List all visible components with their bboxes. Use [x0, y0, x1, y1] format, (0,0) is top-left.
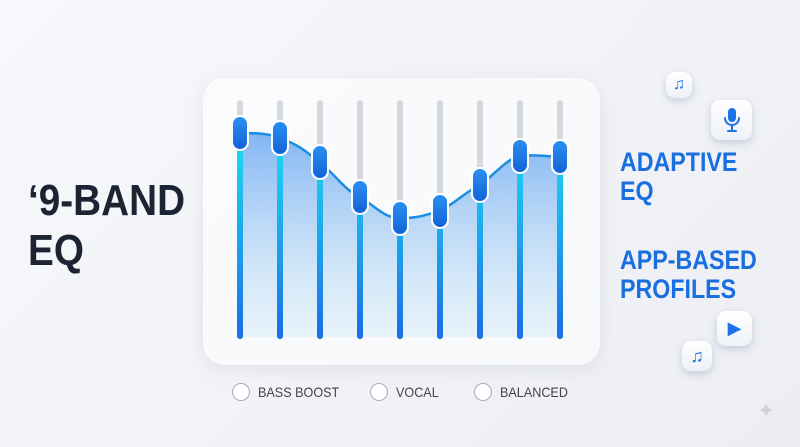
heading: adaptive eq: EQ [620, 176, 654, 206]
icon: play: ▶ [728, 318, 741, 338]
title: EQ [28, 226, 84, 275]
option: balanced [474, 383, 568, 401]
heading: adaptive eq: ADAPTIVE [620, 147, 737, 177]
icon: music note bottom: ♫ [690, 346, 704, 366]
icon: music note top: ♫ [673, 76, 685, 93]
panel: equalizer [203, 78, 600, 365]
icon: music note bottom [682, 341, 712, 371]
option: bass boost [232, 383, 339, 401]
title: ‘9-BAND [28, 176, 185, 225]
heading: app-based profiles [620, 245, 757, 304]
title [28, 176, 185, 275]
icon: microphone [711, 100, 752, 140]
icon: music note top [666, 72, 692, 98]
heading: app-based profiles: APP-BASED [620, 245, 757, 275]
option: bass boost: BASS BOOST [258, 384, 339, 400]
heading: app-based profiles: PROFILES [620, 274, 736, 304]
icon: sparkle: ✦ [757, 398, 775, 423]
option: balanced: BALANCED [500, 384, 568, 400]
option: vocal: VOCAL [396, 384, 439, 400]
option: vocal [370, 383, 439, 401]
heading: adaptive eq [620, 147, 737, 206]
icon: play [717, 311, 752, 346]
